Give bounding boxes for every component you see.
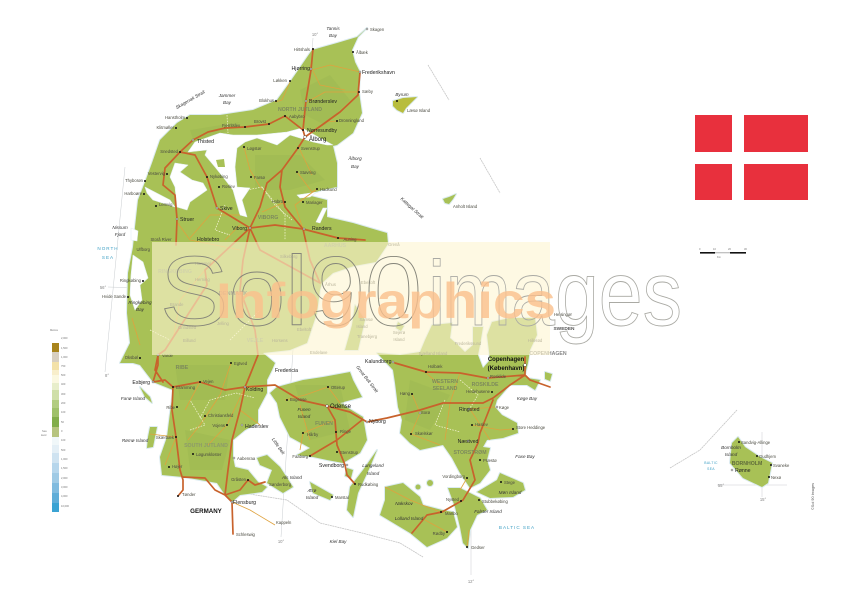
- land: small islands: [140, 305, 552, 490]
- labels: Zealand and southern islands: Hedehusene: [466, 389, 491, 394]
- labels: Central and West Jutland: Hammel: [195, 261, 211, 266]
- labels: Central and West Jutland: 8°: [105, 373, 109, 378]
- labels: North Jutland: Læsø Island: [407, 108, 431, 113]
- labels: North Jutland: Viborg: [232, 226, 247, 232]
- labels: Zealand and southern islands: Falster Island: [474, 509, 502, 514]
- labels: Funen: Svendborg: [319, 463, 344, 469]
- labels: Central and West Jutland: Bramming: [176, 385, 196, 390]
- map inset: Bornholm: Nexø: [771, 475, 781, 480]
- land: Aero island: [310, 482, 333, 500]
- labels: Central and West Jutland: Brande: [170, 302, 184, 307]
- labels: Central and West Jutland: Samsø: [359, 317, 373, 322]
- labels: South Jutland: Ribe: [166, 405, 176, 410]
- labels: Zealand and southern islands: Hillerød: [528, 338, 543, 343]
- labels: Funen: Island: [367, 471, 380, 476]
- labels: Central and West Jutland: Oksbøl: [125, 355, 138, 360]
- labels: Central and West Jutland: Storå River: [151, 237, 172, 242]
- elevation legend: 500: [61, 448, 66, 452]
- scale bar: [699, 247, 747, 259]
- flag of Denmark: [695, 115, 808, 200]
- elevation legend: 1,000: [61, 457, 68, 461]
- map inset: Bornholm: Bornholm: [721, 445, 741, 450]
- labels: North Jutland: Thisted: [197, 139, 214, 145]
- labels: Zealand and southern islands: Møn Island: [499, 490, 522, 495]
- labels: Funen: Great Belt Strait: [355, 365, 380, 394]
- labels: South Jutland: GERMANY: [190, 508, 223, 515]
- labels: Zealand and southern islands: [395, 312, 575, 584]
- labels: Zealand and southern islands: BALTIC SEA: [499, 525, 535, 530]
- labels: South Jutland: Skærbæk: [156, 435, 175, 440]
- map inset: Bornholm: BALTIC: [704, 461, 718, 465]
- labels: South Jutland: Little Belt: [271, 437, 286, 456]
- map inset: Bornholm: BORNHOLM: [732, 461, 762, 467]
- labels: North Jutland: Ålbæk: [356, 50, 369, 55]
- labels: Central and West Jutland: Nissum: [112, 225, 128, 230]
- labels: Central and West Jutland: SEA: [102, 255, 114, 260]
- elevation legend: 300: [61, 392, 66, 396]
- map inset: Bornholm: SEA: [707, 467, 715, 471]
- labels: Central and West Jutland: Ringkøbing: [120, 278, 142, 283]
- elevation legend: 1,500: [61, 466, 68, 470]
- elevation legend: 500: [61, 373, 66, 377]
- labels: Central and West Jutland: Fanø Island: [121, 396, 146, 401]
- labels: Central and West Jutland: Island: [356, 324, 368, 329]
- labels: Funen: Nyborg: [369, 419, 386, 425]
- labels: Central and West Jutland: Jelling: [217, 321, 230, 326]
- labels: Funen: Odense: [330, 404, 352, 410]
- labels: North Jutland: Nykøbing: [210, 174, 228, 179]
- labels: Funen: Bogense: [290, 397, 307, 402]
- labels: North Jutland: Tannis: [326, 26, 340, 31]
- labels: Central and West Jutland: VEJLE: [247, 338, 264, 344]
- labels: North Jutland: Anholt Island: [453, 204, 478, 209]
- labels: North Jutland: Ålborg: [309, 136, 326, 143]
- labels: Zealand and southern islands: Copenhagen: [488, 357, 524, 363]
- labels: North Jutland: Bay: [223, 100, 232, 105]
- labels: North Jutland: Hobro: [272, 199, 284, 204]
- labels: North Jutland: Randers: [312, 226, 332, 232]
- labels: Funen: Faaborg: [292, 454, 309, 459]
- map inset: Bornholm: 15°: [760, 497, 766, 502]
- labels: Funen: Stenstrup: [340, 450, 359, 455]
- labels: Zealand and southern islands: Haslev: [475, 422, 489, 427]
- labels: South Jutland: [122, 405, 347, 544]
- labels: South Jutland: Schleswig: [236, 532, 256, 537]
- labels: Zealand and southern islands: Store Heddinge: [516, 425, 546, 430]
- labels: North Jutland: NORTH JUTLAND: [278, 107, 322, 113]
- labels: South Jutland: Als Island: [281, 475, 302, 480]
- labels: Zealand and southern islands: Høng: [400, 391, 411, 396]
- labels: South Jutland: Christiansfeld: [208, 413, 234, 418]
- watermark: Infographics: Infographics: [216, 273, 556, 329]
- labels: Funen: Hårby: [307, 432, 319, 437]
- labels: Funen: Ærø: [307, 488, 317, 493]
- labels: South Jutland: Aabenraa: [237, 456, 256, 461]
- scale bar: 10: [713, 247, 716, 251]
- labels: Central and West Jutland: 56°: [100, 285, 106, 290]
- scale bar: 30: [744, 247, 747, 251]
- elevation legend: [41, 328, 69, 512]
- labels: North Jutland: Lemvig: [159, 202, 173, 207]
- main roads: [153, 49, 550, 534]
- elevation legend: 50: [61, 420, 64, 424]
- labels: Zealand and southern islands: Vordingborg: [442, 474, 466, 479]
- labels: North Jutland: Frederikshavn: [362, 70, 395, 76]
- labels: North Jutland: Farsø: [254, 175, 265, 180]
- elevation legend: 400: [61, 382, 66, 386]
- labels: North Jutland: Jammer: [218, 93, 236, 98]
- labels: North Jutland: Skagerrak Strait: [175, 89, 206, 110]
- labels: North Jutland: Brønderslev: [309, 99, 337, 105]
- labels: North Jutland: Svenstrup: [301, 146, 321, 151]
- labels: South Jutland: 10°: [278, 539, 284, 544]
- land: Falster island: [448, 488, 487, 548]
- labels: South Jutland: Flensburg: [233, 500, 256, 506]
- labels: Central and West Jutland: Tranebjerg: [357, 334, 378, 339]
- labels: Funen: Marstal: [335, 495, 349, 500]
- labels: Zealand and southern islands: Holbæk: [428, 364, 443, 369]
- labels: North Jutland: Blokhus: [259, 98, 274, 103]
- labels: South Jutland: Gråsten: [231, 477, 247, 482]
- labels: Central and West Jutland: Endelave: [310, 350, 328, 355]
- labels: Zealand and southern islands: Præstø: [483, 458, 497, 463]
- labels: Zealand and southern islands: Rødby: [433, 531, 446, 536]
- water: Limfjord and inlets: [130, 128, 333, 310]
- labels: Central and West Jutland: Bay: [136, 307, 145, 312]
- labels: Zealand and southern islands: WESTERN: [432, 379, 458, 385]
- labels: Zealand and southern islands: ROSKILDE: [472, 382, 499, 388]
- labels: Central and West Jutland: Sejerø: [393, 330, 406, 335]
- elevation legend: Metres: [50, 328, 59, 332]
- labels: Central and West Jutland: Silkeborg: [280, 254, 298, 259]
- labels: Central and West Jutland: Grindsted: [178, 325, 197, 330]
- labels: Central and West Jutland: Vejen: [203, 379, 214, 384]
- elevation legend: 1,000: [61, 355, 68, 359]
- labels: Zealand and southern islands: COPENHAGEN: [529, 351, 567, 357]
- labels: Zealand and southern islands: Nysted: [446, 497, 460, 502]
- labels: Zealand and southern islands: Lolland Island: [395, 516, 424, 521]
- town markers: [127, 48, 514, 548]
- labels: Zealand and southern islands: Helsingør: [554, 312, 573, 317]
- labels: Central and West Jutland: Holstebro: [197, 237, 219, 243]
- labels: South Jutland: Haderslev: [245, 424, 269, 430]
- labels: Central and West Jutland: Island: [393, 337, 405, 342]
- map inset: Bornholm: Rønne: [735, 468, 751, 474]
- labels: Central and West Jutland: Varde: [162, 353, 174, 358]
- map inset: Bornholm: Sandvig-Allinge: [741, 440, 771, 445]
- watermark: Sol90images: Sol90: [160, 236, 422, 346]
- secondary roads: [132, 65, 513, 547]
- labels: Central and West Jutland: Grenå: [388, 242, 400, 247]
- labels: South Jutland: Tønder: [182, 492, 196, 497]
- labels: North Jutland: Bay: [329, 33, 338, 38]
- labels: Zealand and southern islands: Køge: [499, 405, 510, 410]
- labels: North Jutland: Fjerritslev: [222, 123, 241, 128]
- labels: Central and West Jutland: Århus: [325, 282, 336, 287]
- labels: North Jutland: Hanstholm: [165, 115, 186, 120]
- labels: Central and West Jutland: Fredericia: [275, 368, 298, 374]
- labels: North Jutland: Snedsted: [160, 149, 179, 154]
- labels: Zealand and southern islands: Maribo: [445, 511, 458, 516]
- scale bar: Km: [717, 255, 721, 259]
- elevation legend: 2,000: [61, 476, 68, 480]
- labels: North Jutland: Struer: [180, 217, 194, 223]
- labels: North Jutland: Kattegat Strait: [400, 196, 425, 220]
- labels: Central and West Jutland: Billund: [183, 338, 196, 343]
- elevation legend: 100: [61, 410, 66, 414]
- land: Mon island: [477, 473, 525, 498]
- elevation legend: 2,000: [61, 336, 68, 340]
- labels: Central and West Jutland: DENMARK: [219, 291, 247, 297]
- elevation legend: 10,000: [61, 504, 69, 508]
- land: Als island: [257, 455, 293, 493]
- labels: North Jutland: Thyborøn: [125, 178, 144, 183]
- labels: Funen: Rudkøbing: [358, 482, 379, 487]
- labels: Central and West Jutland: AARHUS: [324, 243, 347, 249]
- labels: North Jutland: Harboøre: [124, 191, 143, 196]
- island: Fur in the Limfjord: [216, 159, 225, 167]
- labels: Zealand and southern islands: Frederikssund: [455, 341, 482, 346]
- island: Bornholm: [730, 437, 772, 487]
- labels: Funen: Island: [306, 495, 319, 500]
- elevation legend: 100: [61, 438, 66, 442]
- map inset: Bornholm: Island: [725, 452, 738, 457]
- land: Funen island: [270, 372, 367, 463]
- labels: South Jutland: Sønderborg: [269, 482, 292, 487]
- labels: Funen: Kalundborg: [365, 359, 392, 365]
- labels: Zealand and southern islands: Næstved: [458, 439, 478, 445]
- labels: North Jutland: Mariager: [306, 200, 323, 205]
- map: Denmark landmasses: [120, 28, 552, 548]
- labels: Funen: [290, 359, 392, 500]
- labels: South Jutland: SOUTH JUTLAND: [184, 443, 228, 449]
- labels: Zealand and southern islands: Nakskov: [395, 501, 414, 506]
- labels: Central and West Jutland: Ebeltoft: [361, 280, 376, 285]
- elevation legend: 1,500: [61, 346, 68, 350]
- labels: North Jutland: Vestervig: [148, 171, 166, 176]
- labels: South Jutland: Løgumkloster: [196, 452, 222, 457]
- labels: Central and West Jutland: NORTH: [97, 246, 119, 251]
- labels: Central and West Jutland: [97, 225, 406, 401]
- labels: North Jutland: Klitmøller: [157, 125, 175, 130]
- labels: Zealand and southern islands: (København): [488, 366, 524, 372]
- labels: Zealand and southern islands: SWEDEN: [553, 326, 575, 332]
- labels: North Jutland: Løgstør: [247, 146, 262, 151]
- labels: Zealand and southern islands: Skælskør: [415, 431, 433, 436]
- labels: North Jutland: Byrum: [395, 92, 409, 97]
- elevation legend: 750: [61, 364, 66, 368]
- map inset: Bornholm: Svaneke: [773, 463, 790, 468]
- labels: Central and West Jutland: Egtved: [234, 361, 248, 366]
- labels: North Jutland: Hjørring: [292, 66, 310, 72]
- land: Lolland island: [380, 483, 457, 547]
- labels: Funen: FUNEN: [315, 421, 333, 427]
- labels: North Jutland: Aabybro: [289, 114, 305, 119]
- labels: Funen: Funen: [297, 407, 311, 412]
- labels: North Jutland: Dronninglund: [339, 118, 365, 123]
- labels: Funen: Langeland: [362, 463, 384, 468]
- labels: North Jutland: Auning: [343, 237, 357, 242]
- land: Langeland island: [347, 450, 377, 517]
- labels: South Jutland: Rømø Island: [122, 438, 149, 443]
- labels: Zealand and southern islands: Roskilde: [490, 374, 507, 379]
- labels: Central and West Jutland: Ebeltoft: [297, 327, 312, 332]
- labels: North Jutland: Skive: [220, 206, 233, 212]
- labels: North Jutland: Støvring: [300, 170, 316, 175]
- road network: [132, 49, 550, 547]
- map inset: Bornholm: Gudhjem: [759, 454, 777, 459]
- labels: South Jutland: Højer: [172, 464, 183, 469]
- scale bar: 20: [728, 247, 731, 251]
- labels: North Jutland: [124, 26, 478, 242]
- labels: North Jutland: Hadsund: [320, 187, 337, 192]
- labels: North Jutland: Bay: [351, 164, 360, 169]
- elevation legend: Sea: [42, 429, 47, 433]
- labels: South Jutland: Kiel Bay: [330, 539, 347, 544]
- elevation legend: level: [41, 433, 47, 437]
- watermark: Sol90images: images: [428, 243, 682, 345]
- labels: Central and West Jutland: Fjord: [115, 232, 126, 237]
- labels: Zealand and southern islands: 12°: [468, 579, 474, 584]
- labels: North Jutland: Skagen: [370, 27, 385, 32]
- labels: Zealand and southern islands: Stubbekøbing: [482, 499, 509, 504]
- labels: North Jutland: Nørresundby: [307, 128, 337, 134]
- labels: North Jutland: Hirtshals: [294, 47, 310, 52]
- labels: Zealand and southern islands: Ringsted: [459, 407, 480, 413]
- labels: Central and West Jutland: Ringkøbing: [128, 300, 152, 305]
- labels: Zealand and southern islands: STORSTRØM: [453, 450, 487, 456]
- map inset: Bornholm: 55°: [718, 483, 724, 488]
- regional boundaries: [150, 115, 478, 432]
- land: Laeso island: [393, 97, 417, 113]
- relief patches: [175, 75, 450, 470]
- copyright credit: ©Sol 90 Images: [811, 483, 815, 510]
- watermark panel: [152, 242, 550, 355]
- labels: Central and West Jutland: RINGKØBING: [158, 269, 192, 275]
- labels: Zealand and southern islands: SEELAND: [433, 386, 458, 392]
- labels: South Jutland: Vojens: [212, 423, 225, 428]
- labels: Zealand and southern islands: Køge Bay: [517, 396, 538, 401]
- labels: Central and West Jutland: Ulfborg: [136, 247, 151, 252]
- elevation legend: 200: [61, 401, 66, 405]
- land: Jutland peninsula: [120, 28, 388, 502]
- labels: North Jutland: Løkken: [273, 78, 288, 83]
- labels: North Jutland: Brovst: [254, 119, 267, 124]
- labels: North Jutland: Roslev: [222, 184, 236, 189]
- labels: North Jutland: Sæby: [362, 89, 374, 94]
- labels: Funen: Island: [298, 414, 311, 419]
- labels: Central and West Jutland: RIBE: [176, 365, 189, 371]
- labels: Zealand and southern islands: Stege: [504, 480, 516, 485]
- labels: North Jutland: 10°: [312, 32, 318, 37]
- labels: North Jutland: VIBORG: [258, 215, 278, 221]
- map inset: Bornholm: [704, 432, 790, 502]
- labels: Funen: Otterup: [331, 385, 346, 390]
- labels: Central and West Jutland: Herning: [195, 277, 210, 282]
- labels: Zealand and southern islands: Gedser: [471, 545, 485, 550]
- land: Anholt island: [443, 194, 456, 204]
- labels: Zealand and southern islands: Faxe Bay: [515, 454, 535, 459]
- labels: Zealand and southern islands: Sjælland Island: [419, 351, 448, 356]
- labels: Central and West Jutland: Hvide Sande: [102, 294, 127, 299]
- land: Zealand island: [377, 318, 540, 488]
- labels: Funen: Ringe: [340, 429, 352, 434]
- labels: South Jutland: Kappeln: [276, 520, 292, 525]
- elevation legend: 0: [61, 429, 63, 433]
- labels: Central and West Jutland: Esbjerg: [132, 380, 150, 386]
- labels: Central and West Jutland: Kolding: [246, 387, 263, 393]
- labels: Central and West Jutland: Horsens: [272, 338, 288, 343]
- labels: North Jutland: Ålborg: [347, 155, 362, 161]
- elevation legend: 4,000: [61, 494, 68, 498]
- watermark: Sol90images: [160, 236, 682, 346]
- scale bar: 0: [699, 247, 701, 251]
- elevation legend: 3,000: [61, 485, 68, 489]
- labels: Zealand and southern islands: Sorø: [421, 410, 431, 415]
